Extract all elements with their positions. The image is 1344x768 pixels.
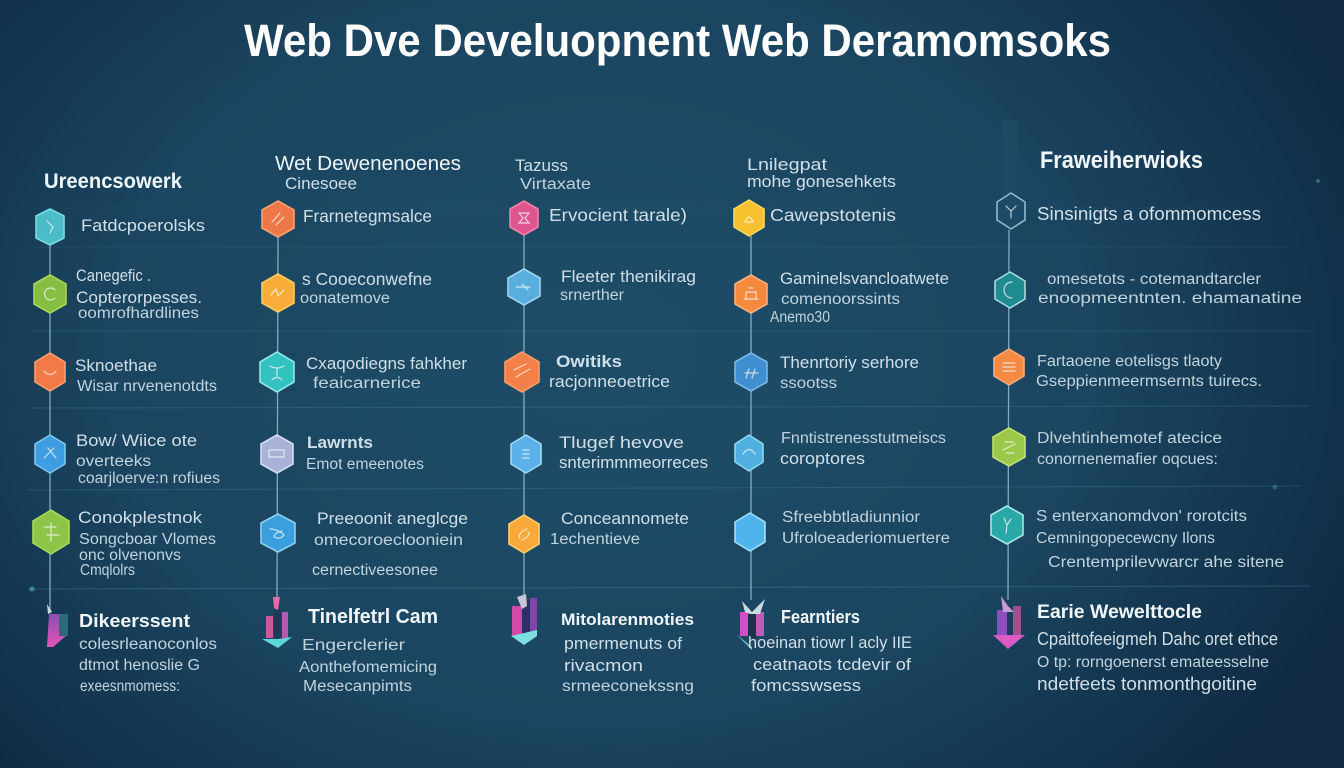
icon: pillar with cyan base — [262, 597, 292, 648]
text: row 5: Ufroloeaderiomuertere — [782, 530, 950, 547]
title: Web Dve Develuopnent Web Deramomsoks — [244, 15, 1111, 66]
text: row 4: Dlvehtinhemotef atecice — [1037, 430, 1222, 447]
icon: lavender hexagon — [261, 435, 293, 473]
text: row 6: hoeinan tiowr l acly IIE — [748, 634, 912, 652]
text: row 2 — [76, 267, 202, 322]
text: row 3: Fartaoene eotelisgs tlaoty — [1037, 353, 1222, 370]
text: row 5: 1echentieve — [550, 531, 640, 548]
connector line: column 5 — [1008, 230, 1009, 600]
icon: teal hexagon — [260, 352, 294, 392]
text: row 6: Fearntiers — [781, 607, 860, 627]
icon: orange hexagon — [994, 349, 1024, 385]
text: row 2: Canegefic . — [76, 267, 151, 285]
text: row 6: ndetfeets tonmonthgoitine — [1037, 674, 1257, 694]
text: row 4 — [559, 434, 708, 472]
text: row 2: Gaminelsvancloatwete — [780, 270, 949, 288]
text: row 2: Fleeter thenikirag — [561, 268, 696, 286]
text: row 1: Frarnetegmsalce — [303, 206, 432, 226]
heading: column 1: Ureencsowerk — [44, 170, 182, 193]
text: row 3: ssootss — [780, 375, 837, 392]
text: row 4 — [306, 434, 424, 473]
heading: column 2: Wet Dewenenoenes — [275, 153, 461, 175]
text: row 3 — [1036, 353, 1262, 390]
text: row 6: Cpaittofeeigmeh Dahc oret ethce — [1037, 629, 1278, 649]
icon: outline hexagon — [997, 193, 1025, 229]
icon: lime hexagon — [33, 510, 69, 554]
icon: light blue hexagon — [508, 269, 540, 305]
text: row 6 — [748, 607, 912, 695]
text: row 4 — [1037, 430, 1222, 468]
text: row 3: Thenrtoriy serhore — [780, 354, 919, 372]
icon: pillar with cyan base — [511, 594, 537, 645]
text: row 5: S enterxanomdvon' rorotcits — [1036, 508, 1247, 525]
heading: column 3 — [515, 157, 591, 193]
text: row 6 — [1037, 602, 1278, 694]
text: row 4: Fnntistrenesstutmeiscs — [781, 430, 946, 447]
icon: orange hexagon — [35, 353, 65, 391]
icon: pink arrow — [47, 604, 68, 647]
text: row 2 — [560, 268, 696, 304]
text: row 2: oomrofhardlines — [78, 305, 199, 322]
text: row 3: racjonneoetrice — [549, 373, 670, 391]
text: row 6: Mitolarenmoties — [561, 610, 694, 629]
panel: column 4 — [734, 156, 950, 695]
text: row 5: omecoroeclooniein — [314, 532, 463, 549]
heading: column 2: Cinesoee — [285, 175, 357, 193]
text: row 5 — [312, 510, 468, 579]
text: row 6 — [299, 606, 438, 695]
icon: light blue hexagon — [735, 435, 763, 471]
text: row 2: comenoorssints — [781, 291, 900, 308]
text: row 2: Copterorpesses. — [76, 289, 202, 307]
text: row 6: Mesecanpimts — [303, 678, 412, 695]
text: row 2: srnerther — [560, 287, 624, 304]
text: row 3 — [75, 357, 217, 395]
text: row 4: Bow/ Wiice ote — [76, 432, 197, 450]
text: row 4: Emot emeenotes — [306, 456, 424, 473]
heading: column 2 — [275, 153, 461, 193]
text: row 5: Songcboar Vlomes — [79, 531, 216, 548]
text: row 3: Owitiks — [556, 353, 622, 371]
text: row 4: overteeks — [76, 453, 151, 470]
text: row 4 — [76, 432, 220, 487]
text: row 4 — [780, 430, 946, 468]
text: row 5 — [1036, 508, 1284, 571]
connector line: column 4 — [750, 236, 752, 600]
text: row 6: Earie Wewelttocle — [1037, 602, 1202, 623]
text: row 5: Cemningopecewcny Ilons — [1036, 530, 1215, 547]
text: row 1: Fatdcpoerolsks — [81, 217, 205, 235]
text: row 4: conornenemafier oqcues: — [1037, 451, 1218, 468]
icon: light blue hexagon — [511, 435, 541, 473]
text: row 4: Tlugef hevove — [559, 434, 684, 452]
text: row 5: Cmqlolrs — [80, 562, 135, 579]
text: row 2 — [1038, 271, 1302, 307]
text: row 5: Conokplestnok — [78, 509, 203, 527]
text: row 6: colesrleanoconlos — [79, 636, 217, 653]
text: row 6: rivacmon — [564, 657, 643, 675]
heading: column 3: Virtaxate — [520, 176, 591, 193]
text: row 5 — [782, 509, 950, 547]
text: row 6 — [79, 611, 217, 695]
heading: column 4: mohe gonesehkets — [747, 173, 896, 191]
icon: teal hexagon — [36, 209, 64, 245]
text: row 5: Conceannomete — [561, 510, 689, 528]
text: row 2: s Cooeconwefne — [302, 269, 432, 289]
text: row 6: Aonthefomemicing — [299, 659, 437, 676]
text: row 3: Gseppienmeermsernts tuirecs. — [1036, 373, 1262, 390]
panel: column 5 — [991, 147, 1302, 694]
icon: orange hexagon — [735, 275, 767, 313]
text: row 5: Sfreebbtladiunnior — [782, 509, 920, 526]
icon: amber hexagon — [262, 274, 294, 312]
text: row 3: Cxaqodiegns fahkher — [306, 355, 468, 373]
icon: orange hexagon — [262, 201, 294, 237]
panel: column 3 — [505, 157, 708, 695]
icon: green hexagon — [993, 428, 1025, 466]
text: row 6 — [561, 610, 694, 695]
heading: column 4 — [747, 156, 896, 191]
text: row 6: ceatnaots tcdevir of — [753, 656, 911, 674]
text: row 5 — [550, 510, 689, 548]
text: row 2: Anemo30 — [770, 309, 830, 326]
text: row 6: Dikeerssent — [79, 611, 190, 631]
text: row 3: Sknoethae — [75, 357, 157, 375]
icon: yellow hexagon — [734, 200, 764, 236]
text: row 6: pmermenuts of — [564, 635, 682, 653]
text: row 5: onc olvenonvs — [79, 547, 181, 564]
text: row 1: Ervocient tarale) — [549, 205, 687, 225]
text: row 4: Lawrnts — [307, 434, 373, 452]
icon: orange hexagon — [505, 352, 539, 392]
text: row 6: fomcsswsess — [751, 677, 861, 695]
connector line: column 1 — [49, 245, 51, 612]
icon: blue hexagon — [35, 435, 65, 473]
icon: sky hexagon — [735, 513, 765, 551]
text: row 3: Wisar nrvenenotdts — [77, 378, 217, 395]
text: row 3: feaicarnerice — [313, 375, 421, 392]
connector line: column 3 — [523, 235, 525, 600]
panel: column 1 — [33, 170, 220, 695]
text: row 6: srmeeconekssng — [562, 678, 694, 695]
connector line: column 2 — [277, 237, 278, 600]
icon: green hexagon — [34, 275, 66, 313]
text: row 3 — [549, 353, 670, 391]
text: row 5: Crentemprilevwarcr ahe sitene — [1048, 554, 1284, 571]
icon: teal hexagon — [991, 506, 1023, 544]
icon: magenta arrow pillar — [993, 596, 1025, 649]
text: row 6: dtmot henoslie G — [79, 657, 200, 674]
text: row 2 — [300, 269, 432, 307]
text: row 2: oonatemove — [300, 290, 390, 307]
text: row 6: exeesnmomess: — [80, 678, 180, 695]
icon: amber hexagon — [509, 515, 539, 553]
text: row 2: omesetots - cotemandtarcler — [1047, 271, 1261, 288]
text: row 4: coarjloerve:n rofiues — [78, 470, 220, 487]
text: row 1: Cawepstotenis — [770, 205, 896, 225]
text: row 6: Tinelfetrl Cam — [308, 606, 438, 628]
icon: pink hexagon — [510, 201, 538, 235]
text: row 3 — [306, 355, 468, 392]
text: row 5: Preeoonit aneglcge — [317, 510, 468, 528]
heading: column 3: Tazuss — [515, 157, 568, 175]
icon: teal hexagon — [995, 272, 1025, 308]
panel: column 2 — [260, 153, 468, 695]
text: row 2 — [770, 270, 949, 326]
text: row 1: Sinsinigts a ofommomcess — [1037, 204, 1261, 224]
heading: column 5: Fraweiherwioks — [1040, 147, 1203, 174]
text: row 4: coroptores — [780, 450, 865, 468]
icon: blue hexagon — [261, 514, 295, 552]
icon: pillar with leaf top — [736, 599, 765, 650]
text: row 2: enoopmeentnten. ehamanatine — [1038, 290, 1302, 307]
text: row 5 — [78, 509, 216, 579]
icon: blue hexagon — [735, 353, 767, 391]
text: row 5: cernectiveesonee — [312, 562, 438, 579]
heading: column 4: Lnilegpat — [747, 156, 827, 174]
text: row 6: O tp: rorngoenerst emateesselne — [1037, 654, 1269, 671]
text: row 4: snterimmmeorreces — [559, 454, 708, 472]
text: row 3 — [780, 354, 919, 392]
text: row 6: Engerclerier — [302, 637, 405, 654]
